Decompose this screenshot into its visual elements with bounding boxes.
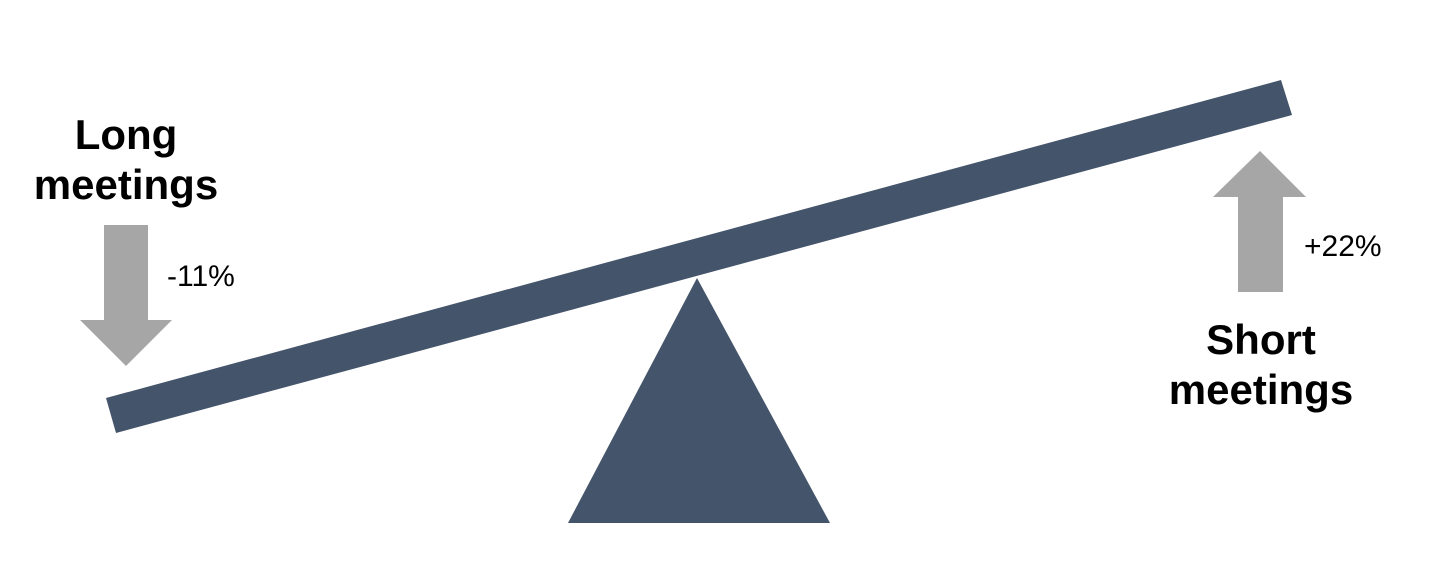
arrow: up (short meetings) xyxy=(1213,151,1306,292)
label: short meetings: meetings xyxy=(1169,366,1353,413)
seesaw beam xyxy=(106,80,1292,433)
seesaw pivot triangle xyxy=(568,278,830,523)
label: long meetings: meetings xyxy=(34,161,218,208)
value: -11%: -11% xyxy=(167,260,235,293)
label: short meetings: Short xyxy=(1206,316,1316,363)
label: long meetings: Long xyxy=(75,111,177,158)
label: long meetings xyxy=(34,111,218,208)
arrow: down (long meetings) xyxy=(80,225,172,366)
label: short meetings xyxy=(1169,316,1353,413)
value: +22%: +22% xyxy=(1304,230,1382,263)
